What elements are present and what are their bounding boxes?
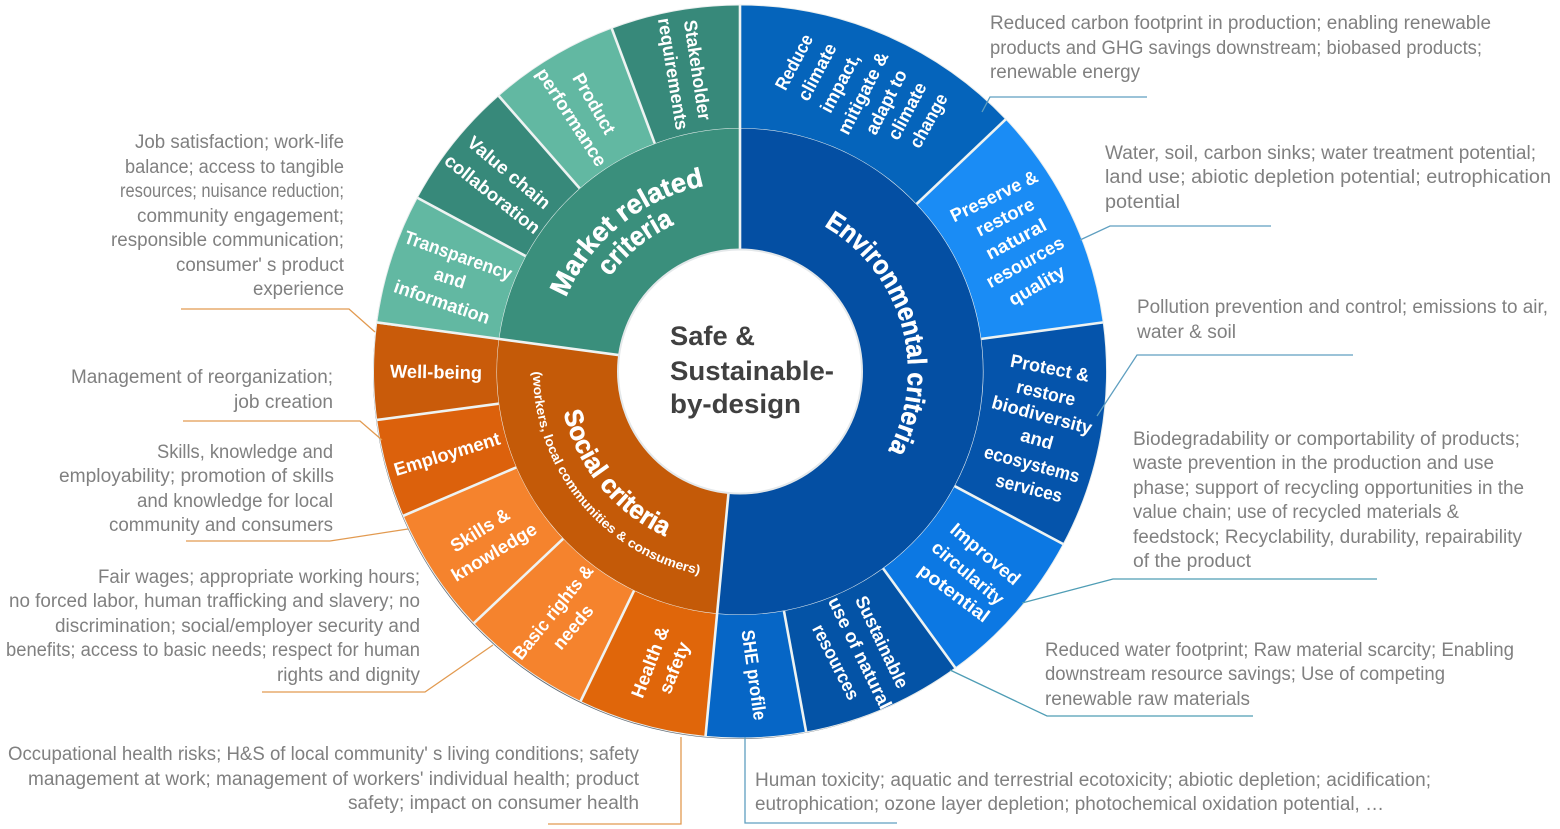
annotation: natural resource use: renewable raw materials	[1045, 689, 1250, 710]
annotation: well-being: balance; access to tangible	[125, 157, 344, 178]
outer segment: Value chain collaboration	[472, 142, 539, 227]
annotation: employment	[71, 367, 333, 413]
annotation: climate impact: renewable energy	[990, 62, 1140, 83]
segment labels: environmental: Preserve &	[947, 166, 1041, 226]
segment labels: environmental: SHE profile	[737, 628, 771, 721]
segment labels: environmental: restore	[1014, 376, 1078, 410]
segment labels: market: Product	[568, 69, 620, 138]
segment labels: environmental: restore	[972, 193, 1038, 240]
segment labels: environmental: biodiversity	[990, 391, 1095, 438]
segment labels: environmental: and	[1018, 424, 1056, 453]
annotation: SHE profile: Human toxicity; aquatic and terrestrial ecotoxicity; abiotic depletion; acidification;	[755, 770, 1431, 791]
annotation: SHE profile: eutrophication; ozone layer depletion; photochemical oxidation potential, …	[755, 794, 1384, 815]
leader line: employment	[183, 421, 382, 440]
inner segment: Market related criteria	[559, 189, 740, 348]
annotation: SHE profile	[755, 770, 1431, 815]
outer segment: Preserve and restore natural resources	[961, 162, 1042, 331]
annotation: well-being: consumer' s product	[176, 255, 345, 276]
annotation: basic rights: no forced labor, human trafficking and slavery; no	[9, 591, 420, 612]
outer segment: Protect and restore biodiversity	[1009, 331, 1045, 515]
annotation: health and safety	[8, 744, 640, 814]
leader line: well-being	[181, 309, 375, 332]
annotation: natural resources: Water, soil, carbon sinks; water treatment potential;	[1105, 143, 1536, 164]
annotation: health and safety: management at work; management of workers' individual health; product	[28, 769, 640, 790]
outer segment: Sustainable use of natural resources	[795, 618, 919, 671]
annotation: well-being: community engagement;	[137, 206, 344, 227]
outer segment: Basic rights and needs	[519, 581, 608, 646]
segment labels: environmental: impact,	[816, 50, 864, 116]
annotation: skills: employability; promotion of skills	[59, 466, 334, 487]
annotation: skills: community and consumers	[109, 515, 333, 536]
heading: Market related criteria: Market related	[550, 166, 703, 296]
heading: Social criteria: (workers, local communities & consumers)	[530, 372, 700, 576]
annotation: well-being: responsible communication;	[111, 230, 344, 251]
leader line: SHE profile	[745, 737, 897, 823]
segment labels: environmental: climate	[883, 79, 931, 143]
annotation: employment: job creation	[233, 392, 333, 413]
outer segment: Product performance	[539, 86, 633, 142]
annotation: basic rights: Fair wages; appropriate working hours;	[98, 567, 420, 588]
segment labels: environmental	[737, 30, 1095, 721]
segment labels: market: and	[432, 263, 469, 293]
segment labels: environmental: Reduce	[770, 30, 817, 93]
segment labels: environmental: potential	[914, 559, 994, 626]
leader line: circularity	[1022, 579, 1377, 603]
outer segment: Health and safety	[608, 646, 711, 675]
center title: Sustainable-	[670, 356, 834, 386]
segment labels: environmental: natural	[982, 214, 1050, 264]
heading: Social criteria: Social criteria	[564, 410, 668, 537]
leader line: natural resource use	[950, 670, 1253, 716]
segment labels: market	[391, 16, 716, 328]
annotation: natural resource use	[1045, 640, 1514, 710]
segment labels: social: Basic rights &	[508, 560, 597, 664]
sunburst chart	[373, 4, 1107, 739]
annotation: basic rights: discrimination; social/employer security and	[55, 616, 420, 637]
annotation: health and safety: Occupational health risks; H&S of local community' s living conditions; safety	[8, 744, 639, 765]
segment labels: environmental: Protect &	[1009, 350, 1091, 386]
outer segment: Stakeholder requirements	[633, 67, 740, 86]
outer segment: Reduce climate impact	[740, 67, 961, 162]
annotation: health and safety: safety; impact on consumer health	[348, 793, 639, 814]
outer segment: Improved circularity	[919, 515, 1009, 618]
annotation: circularity	[1132, 429, 1524, 572]
annotation: biodiversity	[1136, 297, 1548, 343]
annotation: circularity: value chain; use of recycled materials &	[1133, 502, 1459, 523]
segment labels: environmental: quality	[1004, 260, 1069, 310]
leader line: skills	[186, 529, 408, 541]
annotation: well-being: resources; nuisance reduction;	[120, 181, 344, 202]
annotation: natural resources	[1105, 143, 1551, 213]
segment labels: social: Employment	[391, 428, 503, 480]
leader line: natural resources	[1080, 226, 1271, 240]
annotation: circularity: of the product	[1133, 551, 1252, 572]
segment labels: social: needs	[548, 600, 598, 654]
annotation: well-being	[111, 132, 345, 300]
segment labels: market: collaboration	[441, 150, 545, 238]
heading: Environmental criteria: Environmental criteria	[825, 210, 928, 454]
segment labels: social: Well-being	[390, 360, 482, 383]
heading: Market related criteria: criteria	[601, 214, 675, 274]
segment labels: market: information	[391, 276, 493, 328]
leader line: climate impact	[982, 97, 1147, 112]
segment labels: environmental: Sustainable	[851, 592, 913, 692]
segment labels: social: Skills &	[446, 503, 513, 556]
annotation: natural resource use: Reduced water footprint; Raw material scarcity; Enabling	[1045, 640, 1514, 661]
segment labels: social: safety	[654, 638, 694, 697]
annotation: circularity: phase; support of recycling opportunities in the	[1133, 478, 1524, 499]
leader line: basic rights	[262, 645, 493, 692]
annotation: natural resources: potential	[1105, 192, 1180, 213]
segment labels: environmental: ecosystems	[982, 441, 1082, 487]
annotation: well-being: experience	[253, 279, 344, 300]
outer segment: Skills and knowledge	[460, 491, 519, 581]
segment labels: environmental: resources	[808, 621, 864, 703]
annotation: basic rights: benefits; access to basic needs; respect for human	[6, 640, 420, 661]
center hub	[618, 250, 862, 494]
segment labels: environmental: adapt to	[861, 66, 911, 138]
center title: Safe &	[670, 321, 755, 351]
annotation: skills: Skills, knowledge and	[157, 442, 333, 463]
segment labels: environmental: climate	[793, 40, 841, 104]
leader line: health and safety	[548, 737, 681, 824]
annotation: circularity: Biodegradability or comportability of products;	[1133, 429, 1520, 450]
segment labels: environmental: change	[905, 90, 952, 151]
segment labels: environmental: services	[994, 469, 1065, 506]
annotation: biodiversity: Pollution prevention and control; emissions to air,	[1137, 297, 1548, 318]
segment labels: market: performance	[532, 64, 611, 170]
annotation: circularity: waste prevention in the production and use	[1132, 453, 1494, 474]
annotation: basic rights	[6, 567, 420, 686]
center title	[670, 321, 834, 419]
segment labels: market: Value chain	[463, 132, 555, 213]
segment labels: social: Health &	[627, 623, 673, 701]
annotation: climate impact	[990, 13, 1491, 83]
outer segment: Transparency and information	[438, 227, 472, 332]
segment labels: social	[390, 360, 694, 701]
segment labels: environmental: resources	[982, 232, 1068, 292]
center title: by-design	[670, 389, 801, 419]
annotation: climate impact: Reduced carbon footprint in production; enabling renewable	[990, 13, 1491, 34]
annotation: employment: Management of reorganization;	[71, 367, 333, 388]
annotation: skills	[59, 442, 334, 536]
annotation: biodiversity: water & soil	[1136, 322, 1236, 343]
inner segment: Social criteria	[558, 348, 723, 553]
outer segment: SHE profile	[711, 671, 795, 676]
segment labels: market: Stakeholder	[680, 18, 716, 121]
annotation: circularity: feedstock; Recyclability, durability, repairability	[1133, 527, 1522, 548]
leader line: biodiversity	[1097, 355, 1353, 416]
annotation: well-being: Job satisfaction; work-life	[135, 132, 344, 153]
annotation: climate impact: products and GHG savings downstream; biobased products;	[990, 38, 1482, 59]
segment labels: environmental: circularity	[928, 537, 1009, 610]
segment labels: environmental: use of natural	[824, 593, 896, 712]
segment labels: market: requirements	[654, 16, 693, 131]
segment labels: social: knowledge	[447, 518, 540, 586]
segment labels: environmental: Improved	[946, 518, 1025, 589]
outer segment: Well-being	[436, 332, 438, 412]
segment labels: environmental: mitigate &	[833, 48, 893, 138]
annotation: natural resources: land use; abiotic depletion potential; eutrophication	[1105, 167, 1551, 188]
outer segment: Employment	[438, 412, 460, 491]
segment labels: market: Transparency	[402, 226, 516, 284]
annotation: basic rights: rights and dignity	[277, 665, 420, 686]
annotation: natural resource use: downstream resource savings; Use of competing	[1045, 664, 1445, 685]
annotation: skills: and knowledge for local	[137, 491, 333, 512]
inner segment: Environmental criteria	[723, 189, 922, 554]
